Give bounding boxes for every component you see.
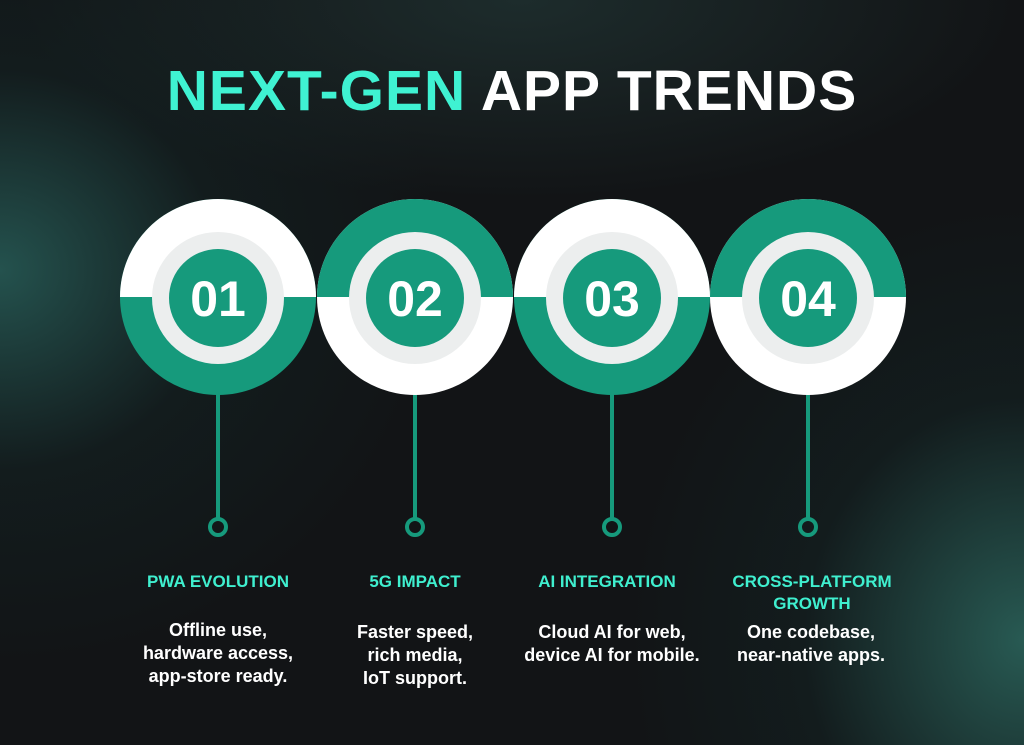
desc 02: IoT support. <box>363 668 467 688</box>
step 02 circle: 02 <box>387 271 443 327</box>
timeline graphic <box>120 199 906 537</box>
label 04 <box>732 572 892 613</box>
desc 03 <box>524 622 700 665</box>
desc 03: device AI for mobile. <box>524 645 700 665</box>
desc 02 <box>357 622 473 688</box>
desc 03: Cloud AI for web, <box>538 622 686 642</box>
step 04 circle <box>710 199 906 535</box>
desc 01: hardware access, <box>143 643 293 663</box>
step 03 circle: 03 <box>584 271 640 327</box>
desc 01: app-store ready. <box>149 666 287 686</box>
desc 01: Offline use, <box>169 620 267 640</box>
desc 04 <box>737 622 885 665</box>
label 02: 5G IMPACT <box>369 572 461 591</box>
desc 04: One codebase, <box>747 622 875 642</box>
desc 02: Faster speed, <box>357 622 473 642</box>
desc 01 <box>143 620 293 686</box>
step 03 circle <box>514 199 710 535</box>
label 04: CROSS-PLATFORM <box>732 572 892 591</box>
label 01: PWA EVOLUTION <box>147 572 289 591</box>
desc 04: near-native apps. <box>737 645 885 665</box>
title: NEXT-GEN APP TRENDS <box>167 59 857 123</box>
label 03: AI INTEGRATION <box>538 572 676 591</box>
step 01 circle: 01 <box>190 271 246 327</box>
desc 02: rich media, <box>367 645 463 665</box>
step 02 circle <box>317 199 513 535</box>
step 01 circle <box>120 199 316 535</box>
label 04: GROWTH <box>773 594 851 613</box>
step 04 circle: 04 <box>780 271 836 327</box>
